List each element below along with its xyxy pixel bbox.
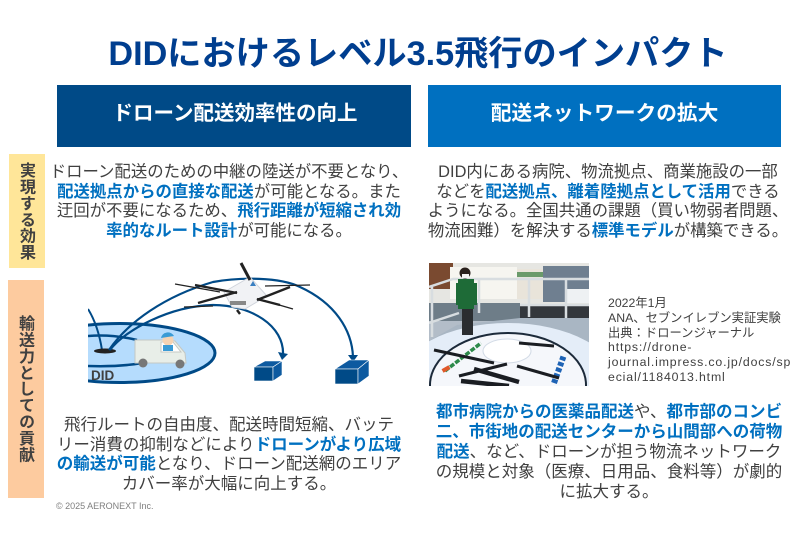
text block: capacity contribution: リー消費の抑制などによりドローンがより広域	[57, 436, 401, 454]
parcel 2	[335, 360, 369, 384]
DID area ellipse	[88, 308, 216, 384]
text block: efficiency effect	[50, 162, 408, 240]
title: DIDにおけるレベル3.5飛行のインパクト	[108, 35, 728, 73]
text block: network effect: 物流困難）を解決する標準モデルが構築できる。	[428, 222, 788, 240]
text block: efficiency effect: 配送拠点からの直接な配送が可能となる。また	[57, 183, 401, 201]
text block: network scale expansion: 配送、など、ドローンが担う物流ネットワーク	[437, 443, 781, 461]
parcel 1	[254, 361, 282, 381]
text block: network effect: ようになる。全国共通の課題（買い物弱者問題、	[428, 202, 788, 220]
row label: realized effects	[9, 154, 45, 268]
flight routes	[109, 279, 353, 357]
text block: efficiency effect: 率的なルート設計が可能になる。	[106, 222, 352, 240]
row label: contribution to transport capacity	[8, 280, 44, 498]
column heading: drone delivery efficiency: ドローン配送効率性の向上	[112, 102, 357, 125]
illustration: drone routes from DID area to parcels	[88, 262, 369, 384]
delivery van	[135, 332, 186, 368]
row label: contribution to transport capacity: 輸送力としての貢献	[16, 315, 33, 463]
column heading: drone delivery efficiency	[57, 85, 411, 147]
text block: network scale expansion: 二、市街地の配送センターから山間部への荷物	[436, 423, 782, 441]
DID area ellipse: DID	[91, 368, 114, 383]
copyright: © 2025 AERONEXT Inc.	[56, 501, 154, 511]
column heading: delivery network expansion: 配送ネットワークの拡大	[491, 102, 718, 125]
text block: network scale expansion: に拡大する。	[560, 483, 658, 501]
text block: capacity contribution: の輸送が可能となり、ドローン配送網のエリア	[57, 455, 401, 473]
text block: efficiency effect: 迂回が不要になるため、飛行距離が短縮され効	[57, 202, 401, 220]
text block: capacity contribution	[57, 416, 401, 493]
text block: capacity contribution: 飛行ルートの自由度、配送時間短縮、バッテ	[64, 416, 394, 434]
photo caption: 2022年1月	[608, 296, 667, 310]
photo caption: https://drone-	[608, 340, 692, 354]
text block: network scale expansion	[436, 402, 782, 501]
photo caption: journal.impress.co.jp/docs/sp	[608, 355, 791, 369]
photo caption	[608, 296, 791, 384]
photo caption: ecial/1184013.html	[608, 370, 726, 384]
row label: realized effects: 実現する効果	[17, 162, 34, 260]
photo caption: 出典：ドローンジャーナル	[608, 326, 754, 340]
arrowheads	[278, 352, 358, 362]
photo: drone on landing pad at convenience store	[429, 263, 589, 386]
column heading: delivery network expansion	[428, 85, 781, 147]
text block: capacity contribution: カバー率が大幅に向上する。	[122, 475, 336, 493]
photo caption: ANA、セブンイレブン実証実験	[608, 311, 781, 325]
text block: efficiency effect: ドローン配送のための中継の陸送が不要となり、	[50, 163, 408, 181]
drone	[175, 263, 310, 314]
text block: network effect	[428, 162, 788, 240]
text block: network scale expansion: の規模と対象（医療、日用品、食料等）が劇的	[436, 463, 782, 481]
text block: network effect: DID内にある病院、物流拠点、商業施設の一部	[438, 163, 778, 181]
text block: network effect: などを配送拠点、離着陸拠点として活用できる	[436, 183, 780, 201]
text block: network scale expansion: 都市病院からの医薬品配送や、都市部のコンビ	[436, 403, 782, 421]
